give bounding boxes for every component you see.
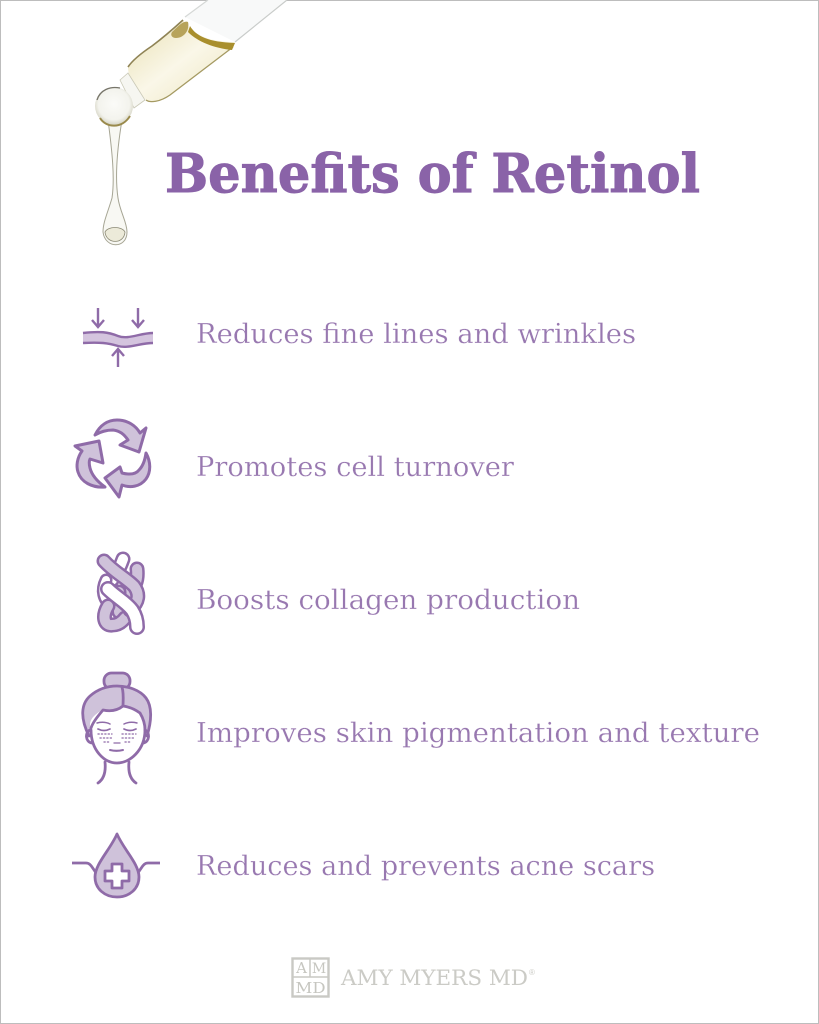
text: reduces and prevents acne scars: Reduces and prevents acne scars <box>196 851 655 882</box>
icon: collagen braid <box>103 559 138 627</box>
benefit 4: skin pigmentation <box>83 673 760 783</box>
benefit 2: cell turnover <box>75 420 514 497</box>
wordmark: AMY MYERS MD <box>340 966 528 990</box>
icon: drop with plus <box>72 834 160 897</box>
logo: Amy Myers MD <box>292 958 535 997</box>
icon: retinol dropper with oil drop <box>95 0 287 245</box>
icon: compressed skin with arrows <box>83 308 153 367</box>
text: reduces fine lines: Reduces fine lines and wrinkles <box>196 319 636 350</box>
logo mark <box>292 958 328 997</box>
benefit 5: acne scars <box>72 834 655 897</box>
text: boosts collagen: Boosts collagen production <box>196 585 580 616</box>
title: Benefits of Retinol <box>165 143 700 205</box>
logo mark: MD <box>296 979 326 997</box>
text: promotes cell turnover: Promotes cell turnover <box>196 452 514 483</box>
logo mark: M <box>312 961 326 977</box>
benefit 1: reduces fine lines <box>83 308 636 367</box>
text: improves skin pigmentation: Improves skin pigmentation and texture <box>196 718 760 749</box>
logo: Amy Myers MD: ® <box>529 968 535 977</box>
icon: recycle arrows <box>75 420 150 497</box>
icon: woman's face with freckles <box>83 673 151 783</box>
benefit 3: collagen <box>103 559 580 627</box>
logo mark: A <box>295 959 307 977</box>
